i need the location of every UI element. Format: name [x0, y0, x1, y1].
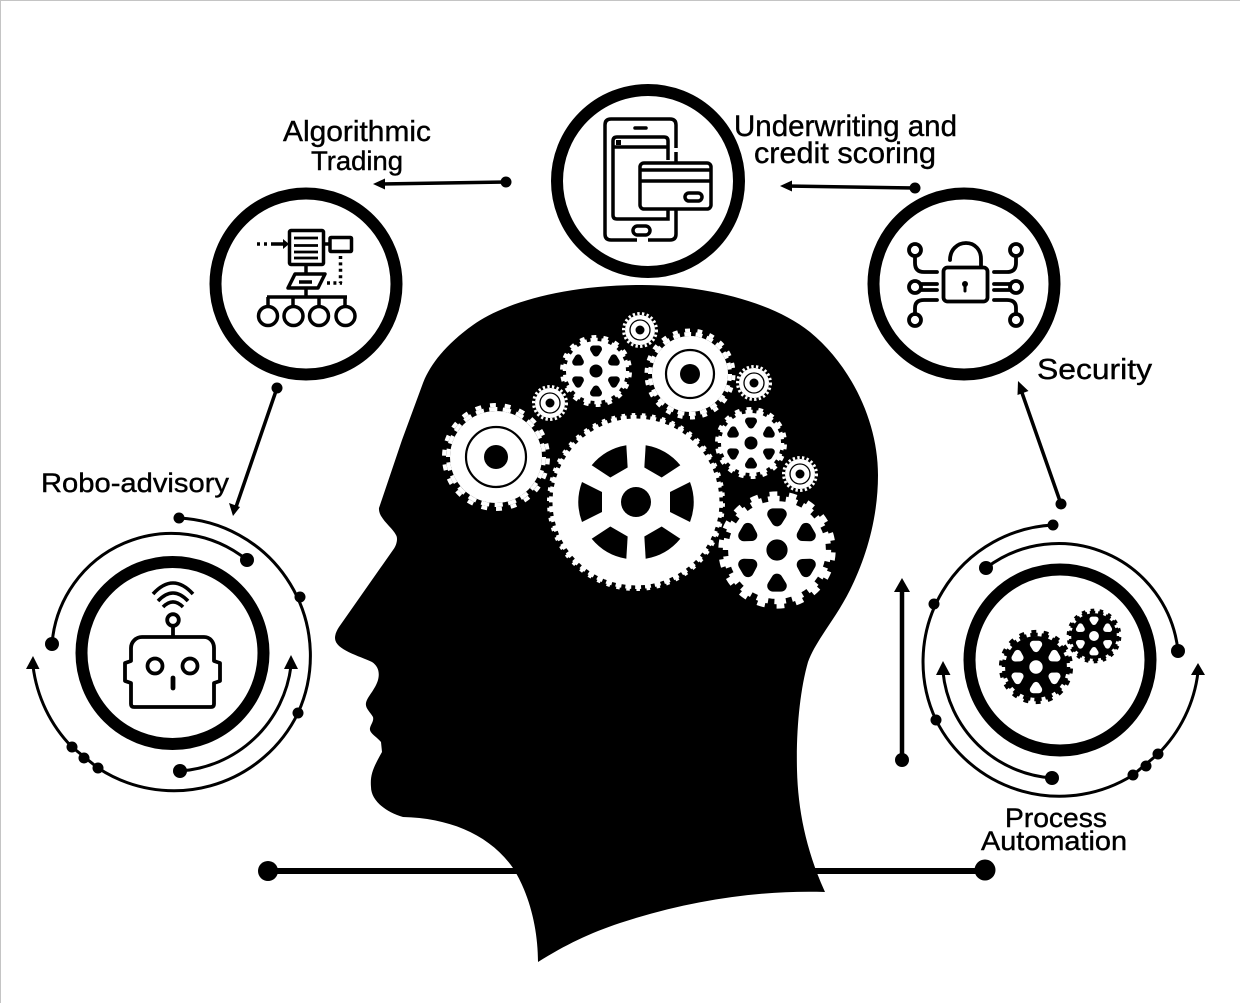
gear: small lower right — [784, 458, 816, 490]
gear: small top — [624, 314, 656, 346]
panel: process automation — [923, 520, 1205, 796]
label: underwriting and credit scoring: credit scoring — [754, 137, 936, 170]
label: process automation: Process — [1005, 803, 1107, 833]
label: algorithmic trading: Algorithmic — [283, 116, 431, 148]
gear: upper ring — [646, 330, 734, 418]
arrow: underwriting to algorithmic trading — [373, 176, 512, 190]
panel: robo-advisory — [26, 512, 310, 791]
head silhouette — [335, 285, 878, 962]
panel: underwriting and credit scoring — [557, 90, 739, 272]
gear: small left — [534, 386, 566, 420]
panel: security — [874, 194, 1054, 374]
brain gears — [444, 314, 833, 606]
ring — [874, 194, 1054, 374]
label: underwriting and credit scoring — [734, 110, 957, 170]
orbit arcs and dots — [26, 512, 310, 791]
icon: phone and card — [605, 119, 711, 240]
icon: robot with wifi — [125, 583, 220, 707]
label: underwriting and credit scoring: Underwriting and — [734, 110, 957, 143]
gear: lower right holed — [721, 494, 833, 606]
gear: small right — [738, 366, 770, 400]
horizontal base line with end dots — [258, 860, 996, 881]
icon: padlock circuit — [909, 243, 1022, 326]
orbit arcs and dots — [923, 520, 1205, 796]
label: robo-advisory: Robo-advisory — [41, 468, 230, 498]
ring — [970, 570, 1150, 750]
label: process automation: Automation — [981, 826, 1127, 856]
arrow: security to underwriting — [780, 180, 920, 194]
ring — [82, 562, 264, 744]
arrow: vertical upward — [894, 578, 910, 767]
label: algorithmic trading: Trading — [311, 146, 403, 176]
label: security: Security — [1037, 354, 1153, 386]
gear: large centre — [548, 414, 724, 590]
icon: two gears — [1001, 610, 1120, 702]
label: process automation — [981, 803, 1127, 856]
arrow: process automation to security — [1018, 381, 1066, 510]
gear: right holed — [717, 409, 785, 477]
icon: algorithm flow — [257, 230, 355, 326]
gear: left ring — [444, 405, 548, 509]
label: algorithmic trading — [283, 116, 431, 176]
ring — [216, 194, 396, 374]
arrow: algorithmic trading to robo-advisory — [229, 382, 282, 516]
ring — [557, 90, 739, 272]
panel: algorithmic trading — [216, 194, 396, 374]
gear: upper holed — [562, 337, 630, 405]
